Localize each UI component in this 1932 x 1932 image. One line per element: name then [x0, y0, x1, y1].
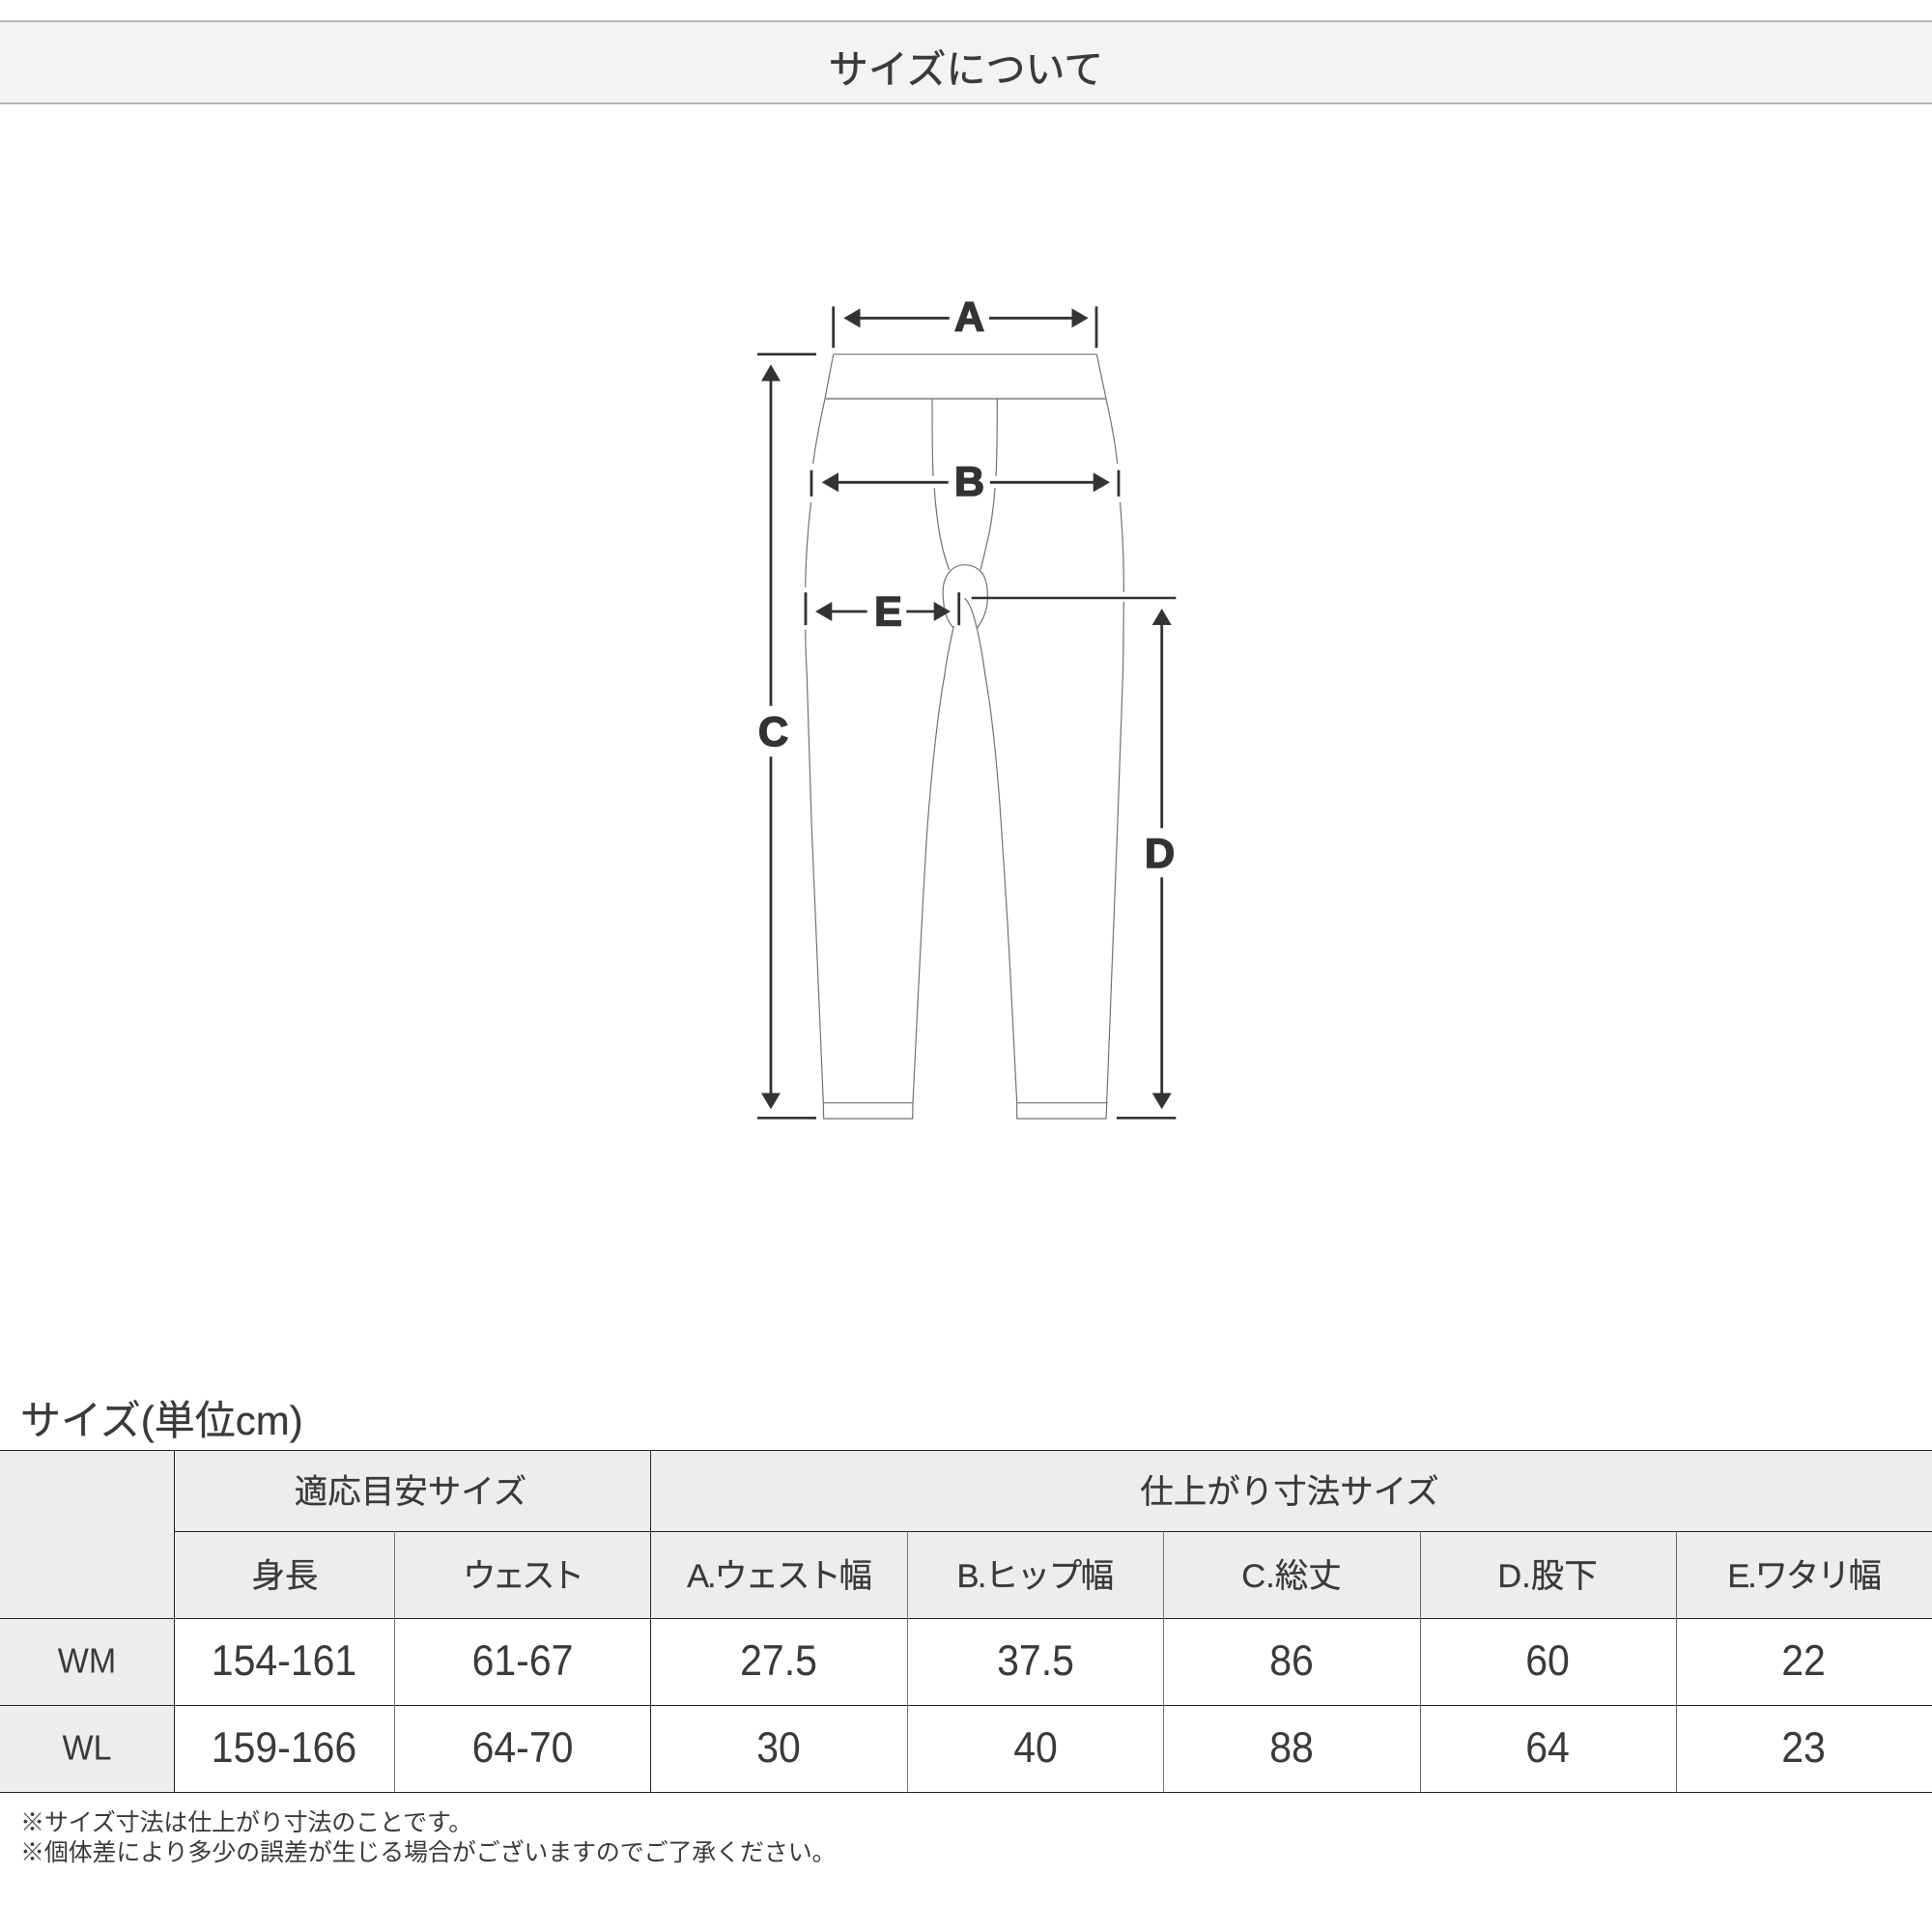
footnotes: ※個体差により多少の誤差が生じる場合がございますのでご了承ください。 — [20, 1839, 836, 1866]
row label WL: WL — [62, 1729, 112, 1768]
group header: finished size: 仕上がり寸法サイズ — [1140, 1474, 1439, 1511]
dimension B: hip width: B — [954, 459, 984, 505]
WM D: 60 — [1525, 1636, 1570, 1685]
column header: E: E.ワタリ幅 — [1727, 1557, 1880, 1594]
header fill — [0, 1450, 1932, 1618]
WL C: 88 — [1269, 1723, 1314, 1772]
column header: A: A.ウェスト幅 — [687, 1557, 870, 1594]
table heading: サイズ(単位cm) — [20, 1398, 303, 1443]
WM C: 86 — [1269, 1636, 1314, 1685]
column header: B: B.ヒップ幅 — [956, 1557, 1113, 1594]
WL waist: 64-70 — [472, 1723, 573, 1771]
title: サイズについて — [829, 47, 1103, 92]
dimension C: total length: C — [758, 709, 788, 755]
group header: recommended size: 適応目安サイズ — [295, 1474, 526, 1511]
row label fill — [0, 1450, 174, 1793]
dimension D: inseam — [972, 598, 1176, 1118]
dimension D: inseam: D — [1145, 831, 1175, 877]
dimension B: hip width — [811, 459, 1119, 505]
dimension A: waist width: A — [954, 294, 984, 340]
WL A: 30 — [756, 1723, 801, 1771]
size table — [0, 1450, 1932, 1793]
WL height: 159-166 — [212, 1723, 356, 1771]
footnotes: ※サイズ寸法は仕上がり寸法のことです。 — [20, 1808, 472, 1835]
WM A: 27.5 — [740, 1636, 817, 1685]
WM B: 37.5 — [997, 1636, 1074, 1685]
dimension A: waist width — [834, 294, 1096, 348]
WM E: 22 — [1781, 1636, 1826, 1685]
WL E: 23 — [1781, 1723, 1826, 1772]
WM waist: 61-67 — [472, 1636, 573, 1685]
title band — [0, 20, 1932, 104]
column header: waist: ウェスト — [463, 1557, 581, 1594]
column header: C: C.総丈 — [1241, 1557, 1342, 1594]
column header: D: D.股下 — [1497, 1557, 1598, 1594]
column header: height: 身長 — [251, 1557, 319, 1594]
row label WM: WM — [58, 1642, 116, 1681]
WL B: 40 — [1013, 1723, 1058, 1771]
dimension E: thigh width: E — [874, 588, 902, 635]
WL D: 64 — [1525, 1723, 1570, 1772]
leggings outline — [806, 355, 1123, 1119]
dimension E: thigh width — [806, 588, 959, 635]
footnotes — [20, 1808, 836, 1866]
dimension C: total length — [757, 355, 816, 1118]
WM height: 154-161 — [212, 1636, 356, 1685]
garment measurement diagram — [757, 294, 1177, 1120]
